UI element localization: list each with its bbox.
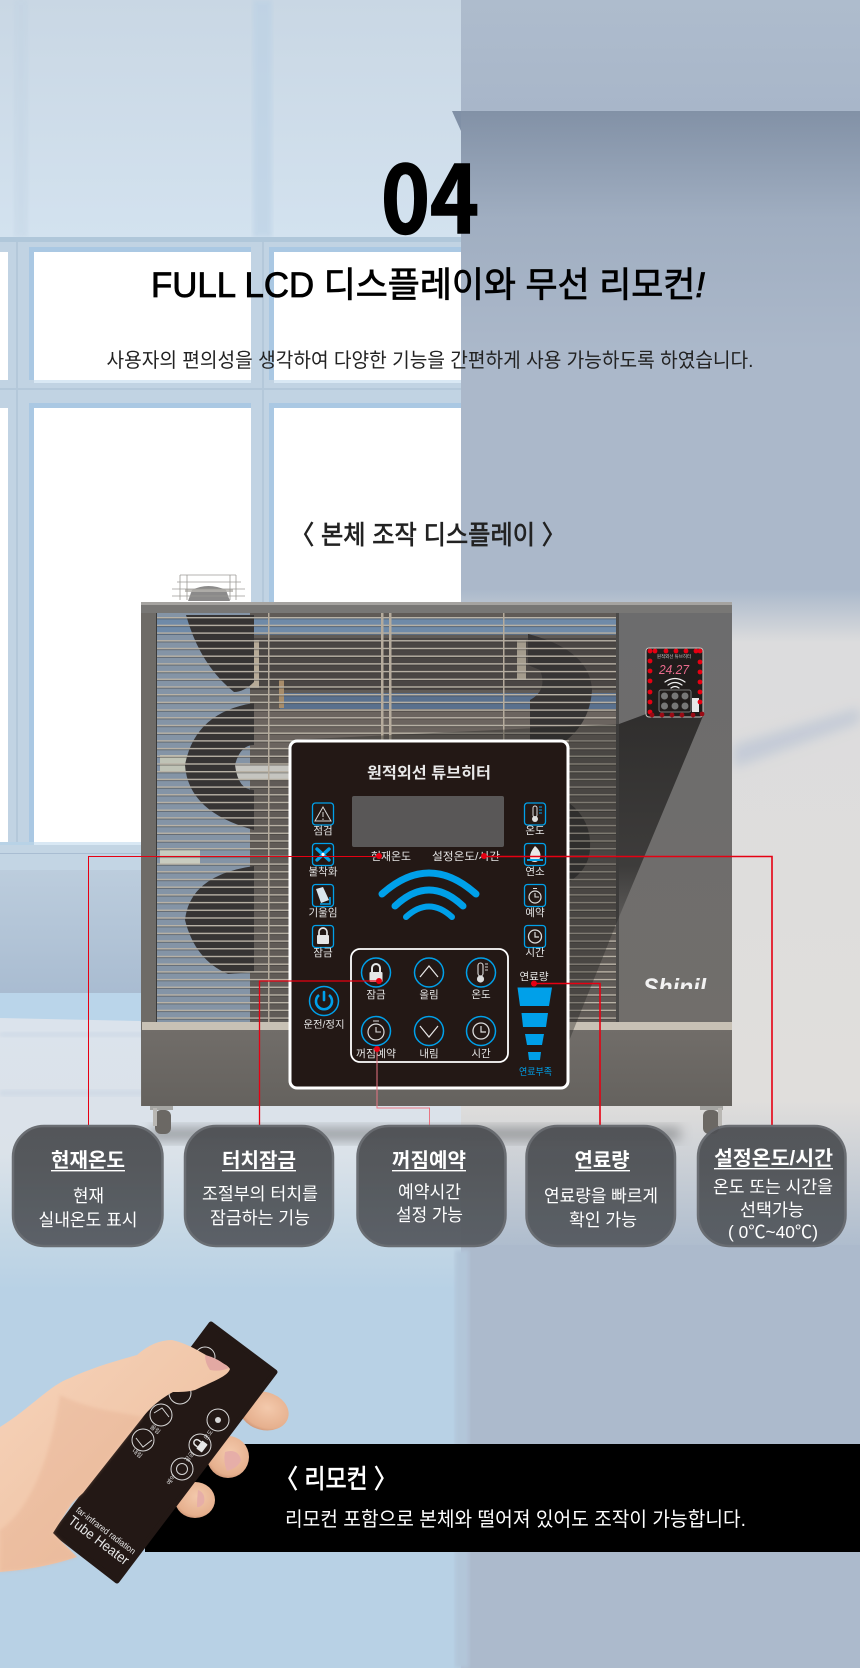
callout: current temperature: 현재 (73, 1186, 104, 1206)
LCD labels (371, 850, 500, 863)
heater unit (141, 575, 732, 1134)
fuel gauge: 연료부족 (519, 1067, 552, 1078)
button: down: 내림 (419, 1048, 439, 1060)
remote control: 예약 (165, 1473, 178, 1487)
section number: 04 (381, 125, 479, 260)
remote control: 올림 (148, 1423, 162, 1436)
button: up: 올림 (419, 989, 439, 1001)
callout: touch lock: 터치잠금 (222, 1149, 296, 1172)
caption text: 리모컨 포함으로 본체와 떨어져 있어도 조작이 가능합니다. (285, 1508, 746, 1531)
callout: off timer: 예약시간 (398, 1182, 461, 1202)
mini control panel with red dotted outline: 원적외선 튜브히터 (657, 653, 691, 660)
heater left frame and top (141, 602, 732, 1106)
icon: inspection: 점검 (313, 825, 333, 837)
heading: FULL LCD 디스플레이와 무선 리모컨! (151, 266, 705, 305)
icon: lock (312, 926, 334, 959)
callout: touch lock: 조절부의 터치를 (202, 1184, 318, 1204)
callout: touch lock: 잠금하는 기능 (210, 1208, 310, 1228)
callout: set temperature and time (698, 1126, 846, 1246)
thumb nail (205, 1355, 229, 1371)
callout: set temperature and time: 온도 또는 시간을 (713, 1177, 833, 1197)
callout: touch lock (185, 1126, 333, 1246)
chimney guard (172, 575, 245, 601)
callout: fuel level (526, 1126, 675, 1246)
button: power (304, 986, 344, 1031)
fuel gauge: 연료량 (520, 971, 549, 983)
callout: off timer: 설정 가능 (396, 1205, 463, 1225)
fingers behind remote (175, 1386, 293, 1518)
callout: current temperature: 현재온도 (51, 1149, 125, 1172)
icon: reservation: 예약 (525, 906, 545, 919)
icon: tilt: 기울임 (309, 906, 337, 919)
button: down (414, 1016, 444, 1060)
callout: current temperature (13, 1126, 162, 1246)
palm shading (0, 1395, 143, 1572)
callout: off timer: 꺼짐예약 (392, 1149, 466, 1172)
callout: off timer (358, 1126, 506, 1246)
button: temperature (466, 958, 496, 1001)
remote text: far-infrared radiation (74, 1505, 138, 1556)
fuel gauge (518, 971, 552, 1078)
icon: reservation (524, 884, 546, 919)
icon: time (524, 926, 546, 959)
remote caption band (145, 1444, 860, 1552)
palm and thumb (0, 1340, 230, 1572)
remote control: 온도 (203, 1428, 215, 1442)
callout leader lines (88, 853, 772, 1128)
callout: fuel level: 연료량을 빠르게 (544, 1186, 658, 1206)
left caster (150, 1106, 173, 1134)
callout: set temperature and time: 설정온도/시간 (714, 1147, 833, 1170)
remote control (55, 1324, 275, 1581)
mini control panel with red dotted outline (646, 648, 704, 717)
callout: fuel level: 확인 가능 (569, 1210, 637, 1230)
button: time (466, 1016, 496, 1060)
panel title: 원적외선 튜브히터 (367, 764, 491, 782)
icon: wireless (382, 873, 476, 917)
callout: set temperature and time: 선택가능 (740, 1200, 804, 1220)
callout: set temperature and time: ( 0℃~40℃) (728, 1222, 818, 1242)
finger nails (197, 1451, 241, 1507)
heater base band (142, 1030, 732, 1106)
button: power: 운전/정지 (304, 1019, 344, 1031)
button: lock (362, 958, 390, 1001)
icon: ignition failure: 불착화 (309, 866, 338, 878)
caption heading: 〈 리모컨 〉 (275, 1464, 397, 1494)
icon: inspection (312, 803, 334, 837)
heater side panel (619, 613, 732, 1024)
callout: fuel level: 연료량 (574, 1149, 630, 1172)
button: off timer (356, 1016, 396, 1060)
mini control panel with red dotted outline: 24.27 (658, 662, 690, 677)
icon: lock: 잠금 (313, 947, 333, 959)
icon: tilt (309, 884, 337, 919)
button: lock: 잠금 (366, 989, 386, 1001)
right caster (700, 1106, 723, 1134)
large control panel (290, 741, 568, 1088)
remote control: 잠금 (184, 1450, 196, 1464)
LCD labels: 설정온도/시간 (432, 850, 500, 863)
icon: time: 시간 (525, 947, 545, 959)
LCD window (352, 796, 504, 847)
subheading: 사용자의 편의성을 생각하여 다양한 기능을 간편하게 사용 가능하도록 하였습니다. (106, 349, 754, 372)
icon: temperature (524, 803, 546, 837)
button: up (414, 958, 444, 1001)
section heading: main body display: 〈 본체 조작 디스플레이 〉 (290, 520, 566, 550)
heater grille (155, 613, 616, 1023)
magnified projection beam (289, 714, 703, 1041)
hand holding remote (0, 1324, 293, 1581)
LCD labels: 현재온도 (371, 850, 411, 863)
heating coil tubes (185, 615, 592, 974)
button: off timer: 꺼짐예약 (356, 1047, 396, 1060)
button: time: 시간 (471, 1048, 491, 1060)
callout: current temperature: 실내온도 표시 (38, 1210, 138, 1230)
button: temperature: 온도 (471, 989, 491, 1001)
brand logo: Shinil (643, 974, 707, 1002)
remote control: 내림 (130, 1447, 144, 1460)
icon: ignition failure (309, 844, 338, 878)
icon: combustion: 연소 (525, 866, 545, 878)
icon: combustion (524, 844, 546, 878)
remote control: Tube Heater (65, 1512, 133, 1568)
touch button group (351, 949, 508, 1062)
icon: temperature: 온도 (525, 825, 545, 837)
